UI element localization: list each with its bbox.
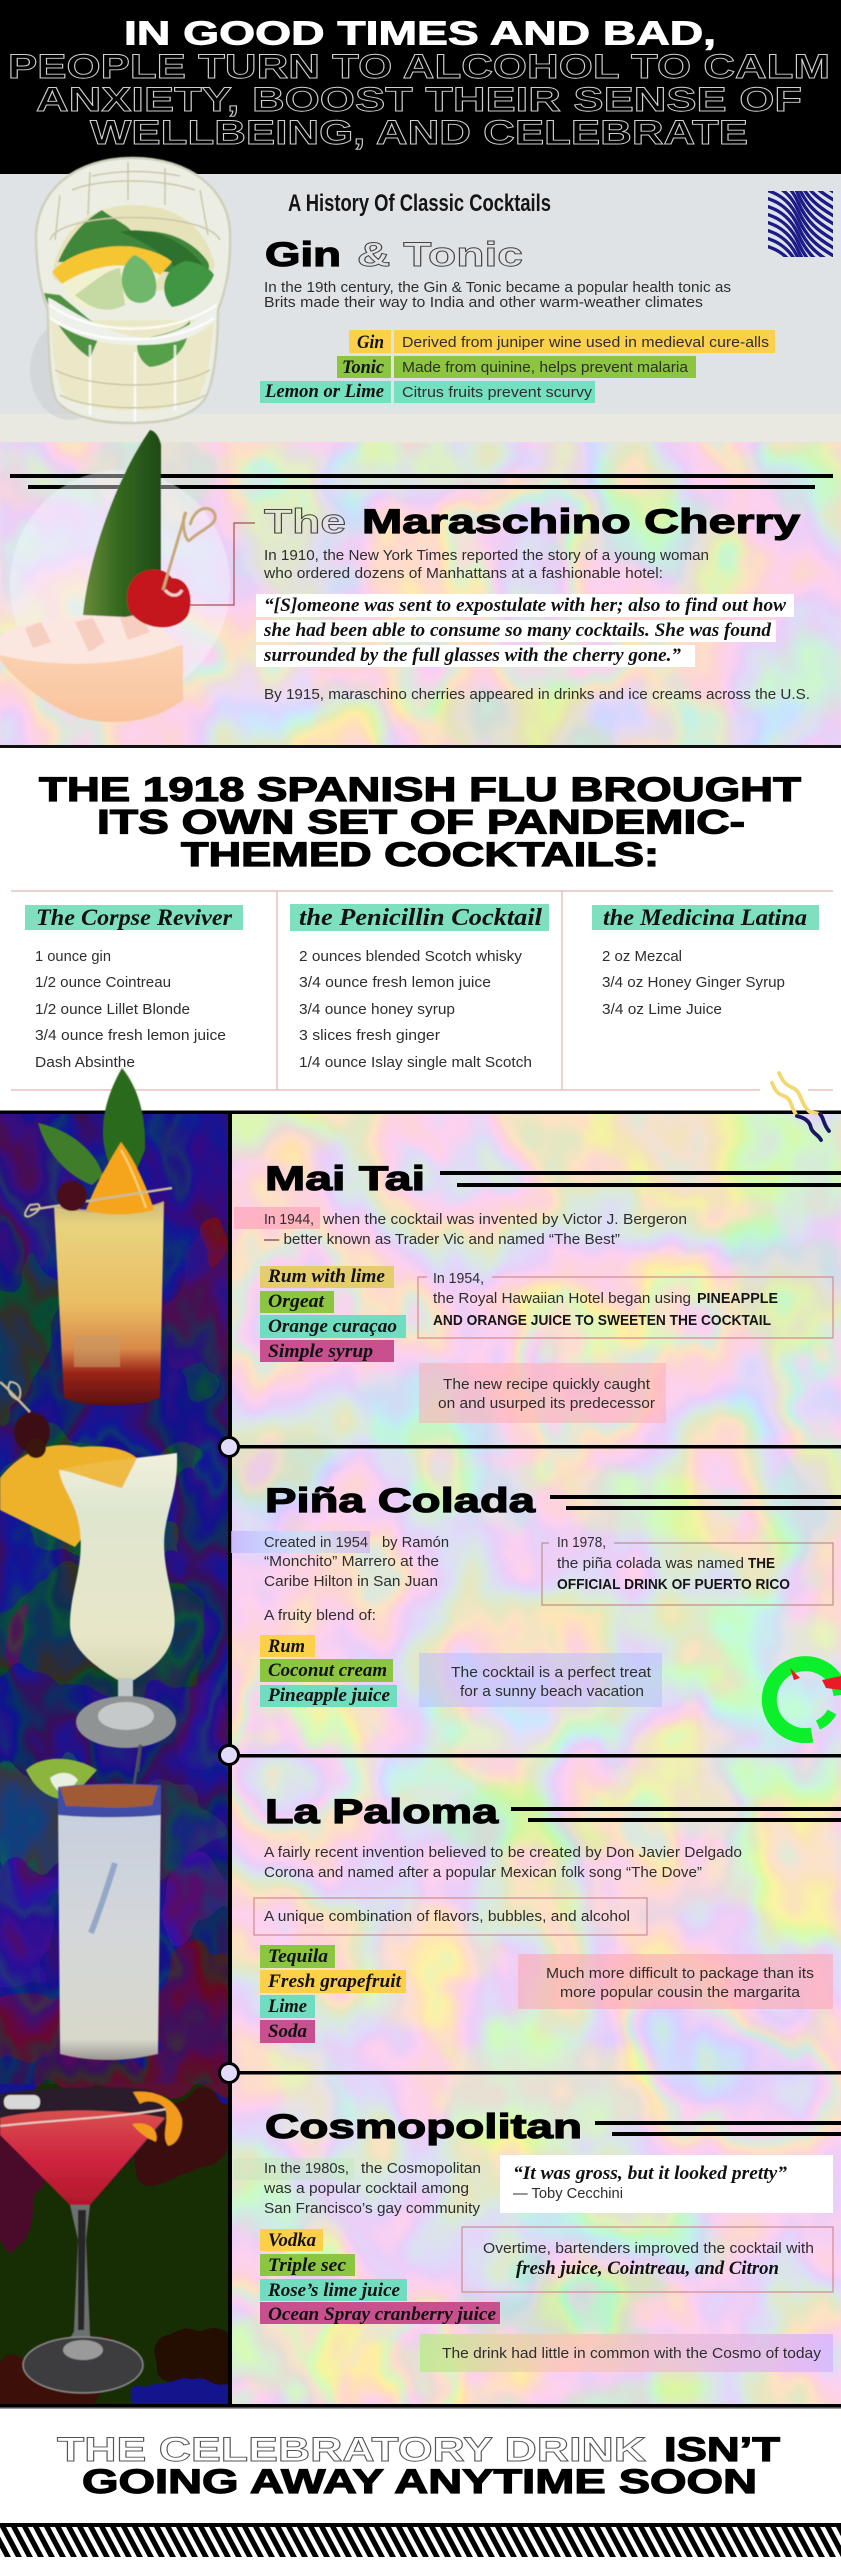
text: gin and tonic history: Brits made their way to India and other warm-weather climates [264, 294, 703, 311]
section: la paloma [26, 1745, 841, 2060]
ingredient chips: Orgeat [268, 1291, 325, 1312]
column: the corpse reviver: 1/2 ounce Lillet Blonde [35, 1001, 190, 1018]
column: the corpse reviver: Dash Absinthe [35, 1054, 135, 1071]
callout: 1954 royal hawaiian: In 1954, [433, 1270, 484, 1287]
ingredient row: gin [349, 330, 775, 353]
text: 1944 origin [234, 1207, 687, 1248]
title: the maraschino cherry [264, 503, 800, 541]
ingredient chips: Tequila [268, 1946, 329, 1967]
callout: harder to package: Much more difficult to package than its [546, 1965, 814, 1982]
headline outlined text: WELLBEING, AND CELEBRATE [90, 114, 748, 152]
illustration: gin glass [30, 158, 230, 423]
ingredient chips [260, 2229, 500, 2325]
ingredient chips [260, 1266, 406, 1362]
ingredient row: lemon or lime [260, 381, 595, 403]
text: 1980s origin: was a popular cocktail among [263, 2180, 469, 2197]
callout: unique combination: A unique combination of flavors, bubbles, and alcohol [264, 1908, 630, 1925]
column: the corpse reviver: 1 ounce gin [35, 948, 111, 965]
ingredient chips: Coconut cream [268, 1660, 387, 1681]
ingredient row: gin: Derived from juniper wine used in medieval cure-alls [402, 334, 769, 351]
ingredient row: tonic: Tonic [342, 357, 385, 378]
quote: toby cecchini: — Toby Cecchini [513, 2185, 623, 2202]
text: 1944 origin: — better known as Trader Vic and named “The Best” [264, 1231, 620, 1248]
text: 1944 origin: when the cocktail was invented by Victor J. Bergeron [322, 1211, 687, 1228]
double rule [10, 474, 833, 489]
ingredient row: gin: Gin [357, 332, 384, 353]
column: the penicillin cocktail: 2 ounces blended Scotch whisky [299, 948, 523, 965]
frame lines and nodes [0, 1110, 841, 2409]
ingredient chips: Rum with lime [267, 1266, 386, 1287]
section: cosmopolitan [0, 2087, 841, 2393]
header banner [0, 0, 841, 174]
panel: gin and tonic [0, 174, 841, 442]
callout: harder to package: more popular cousin the margarita [560, 1984, 801, 2001]
closing headline [57, 2431, 780, 2501]
callout: 1978 official drink: In 1978, [557, 1534, 606, 1551]
ingredient chips: Soda [268, 2021, 307, 2042]
illustration: mai tai glass [0, 1068, 172, 1452]
callout: 1978 official drink: THE [748, 1555, 775, 1572]
headline outlined text: ANXIETY, BOOST THEIR SENSE OF [36, 81, 802, 119]
title: la paloma: La Paloma [265, 1793, 499, 1831]
quote: white highlighted block: surrounded by the full glasses with the cherry gone.” [263, 645, 681, 666]
text: 1980s origin: the Cosmopolitan [361, 2160, 481, 2177]
ingredient chips: Triple sec [268, 2255, 347, 2276]
text: fairly recent invention: A fairly recent invention believed to be created by Don Javier Delgado [264, 1844, 742, 1861]
callout: 1954 royal hawaiian: AND ORANGE JUICE TO SWEETEN THE COCKTAIL [433, 1312, 771, 1329]
column: the medicina latina [592, 905, 819, 1018]
ingredient chips: Simple syrup [268, 1341, 373, 1362]
callout: sunny beach vacation: The cocktail is a perfect treat [451, 1664, 652, 1681]
text: new york times story: In 1910, the New York Times reported the story of a young woman [264, 547, 709, 564]
text: fairly recent invention: Corona and named after a popular Mexican folk song “The Dove” [264, 1864, 702, 1881]
column: the corpse reviver: 1/2 ounce Cointreau [35, 974, 171, 991]
callout: 1978 official drink [542, 1534, 833, 1605]
callout: sunny beach vacation: for a sunny beach vacation [460, 1683, 644, 1700]
heading: 1918 spanish flu: THE 1918 SPANISH FLU BROUGHT [39, 771, 801, 809]
column: the penicillin cocktail: 3 slices fresh ginger [299, 1027, 440, 1044]
section heading: a history of classic cocktails: A History Of Classic Cocktails [288, 190, 551, 217]
table: pandemic cocktails [11, 891, 833, 1090]
column: the corpse reviver: The Corpse Reviver [36, 905, 233, 930]
text: gin and tonic history [264, 279, 731, 311]
ingredient row: lemon or lime: Citrus fruits prevent scurvy [402, 384, 593, 401]
column: the medicina latina: 3/4 oz Lime Juice [602, 1001, 722, 1018]
title: mai tai: Mai Tai [265, 1160, 425, 1198]
column: the penicillin cocktail: 1/4 ounce Islay single malt Scotch [299, 1054, 532, 1071]
double rule [440, 1171, 841, 1187]
icon: green ring [769, 1664, 841, 1736]
headline outlined text: PEOPLE TURN TO ALCOHOL TO CALM [8, 48, 830, 86]
title: pina colada: Piña Colada [265, 1482, 537, 1520]
callout: unique combination [254, 1898, 647, 1935]
quote: toby cecchini [500, 2155, 833, 2213]
illustration: la paloma glass [26, 1745, 161, 2060]
text: gin and tonic history: In the 19th century, the Gin & Tonic became a popular health tonic as [264, 279, 731, 296]
callout: new recipe [419, 1363, 666, 1423]
section: pina colada [0, 1438, 841, 1772]
ingredient row: tonic: Made from quinine, helps prevent malaria [402, 359, 689, 376]
headline outlined text [8, 48, 830, 152]
title: gin and tonic: Gin [265, 236, 341, 274]
quote: toby cecchini: “It was gross, but it looked pretty” [513, 2163, 788, 2184]
closing headline: THE CELEBRATORY DRINK [57, 2431, 647, 2469]
illustration: pina colada glass [0, 1438, 177, 1772]
quote: white highlighted block [256, 594, 794, 667]
title: cosmopolitan: Cosmopolitan [265, 2108, 582, 2146]
headline line: IN GOOD TIMES AND BAD, [124, 14, 716, 52]
text: 1980s origin: San Francisco’s gay community [264, 2200, 480, 2217]
callout: new recipe: on and usurped its predecessor [438, 1395, 655, 1412]
column: the medicina latina: 3/4 oz Honey Ginger Syrup [602, 974, 785, 991]
text: 1980s origin: In the 1980s, [264, 2160, 349, 2177]
ingredient chips: Pineapple juice [267, 1685, 391, 1706]
ingredient row: tonic [337, 356, 696, 378]
quote: white highlighted block: she had been able to consume so many cocktails. She was found [263, 620, 772, 641]
column: the corpse reviver [25, 905, 243, 1071]
panel: maraschino cherry [0, 430, 841, 765]
double rule [595, 2121, 841, 2136]
text: created in 1954: by Ramón [382, 1534, 449, 1551]
title: gin and tonic [265, 236, 523, 274]
icon: wavy stripe pattern [768, 191, 833, 257]
double rule [511, 1807, 841, 1822]
double rule [550, 1495, 841, 1510]
callout: 1954 royal hawaiian: PINEAPPLE [697, 1290, 778, 1307]
column: the penicillin cocktail: 3/4 ounce honey syrup [299, 1001, 455, 1018]
callout: sunny beach vacation [419, 1653, 662, 1707]
quote: white highlighted block: “[S]omeone was sent to expostulate with her; also to find out how [264, 595, 786, 616]
title: the maraschino cherry: The [264, 503, 346, 541]
text: 1944 origin: In 1944, [264, 1211, 314, 1228]
closing headline: ISN’T [664, 2431, 780, 2469]
section: mai tai [0, 1068, 841, 1452]
ingredient chips [260, 1945, 406, 2043]
column: the penicillin cocktail: 3/4 ounce fresh lemon juice [299, 974, 491, 991]
panel: dark swirl backdrop [0, 1114, 228, 2404]
panel: iridescent backdrop [220, 1095, 841, 2420]
ingredient chips: Ocean Spray cranberry juice [268, 2304, 497, 2325]
callout: little in common: The drink had little in common with the Cosmo of today [442, 2345, 822, 2362]
ingredient row: lemon or lime: Lemon or Lime [264, 381, 385, 402]
column: the penicillin cocktail [290, 904, 549, 1071]
callout: 1954 royal hawaiian: the Royal Hawaiian Hotel began using [433, 1290, 691, 1307]
callout: 1954 royal hawaiian [418, 1270, 833, 1338]
heading: 1918 spanish flu [39, 771, 801, 874]
column: the corpse reviver: 3/4 ounce fresh lemon juice [35, 1027, 226, 1044]
column: the medicina latina: 2 oz Mezcal [602, 948, 682, 965]
text: created in 1954: Caribe Hilton in San Juan [264, 1573, 438, 1590]
callout: 1978 official drink: OFFICIAL DRINK OF PUERTO RICO [557, 1576, 790, 1593]
callout: overtime improved [462, 2227, 833, 2292]
title: the maraschino cherry: Maraschino Cherry [362, 503, 800, 541]
closing headline: GOING AWAY ANYTIME SOON [82, 2463, 757, 2501]
heading: 1918 spanish flu: ITS OWN SET OF PANDEMIC- [97, 804, 745, 842]
text: created in 1954: “Monchito” Marrero at the [264, 1553, 439, 1570]
text: new york times story [263, 547, 709, 582]
ingredient chips: Orange curaçao [268, 1316, 397, 1337]
illustration: cocktail with leaf and cherry [0, 430, 230, 722]
text: a fruity blend of: A fruity blend of: [264, 1607, 376, 1624]
text: new york times story: who ordered dozens of Manhattans at a fashionable hotel: [263, 565, 663, 582]
callout: 1978 official drink: the piña colada was named [557, 1555, 744, 1572]
text: by 1915: By 1915, maraschino cherries appeared in drinks and ice creams across the U.S. [264, 686, 810, 703]
text: 1980s origin [234, 2158, 481, 2217]
heading: 1918 spanish flu: THEMED COCKTAILS: [181, 836, 659, 874]
icon: squiggle [772, 1073, 829, 1140]
title: gin and tonic: & Tonic [357, 236, 523, 274]
ingredient chips: Rose’s lime juice [267, 2280, 401, 2301]
ingredient chips: Rum [267, 1636, 305, 1657]
ingredient chips [260, 1635, 397, 1707]
callout: new recipe: The new recipe quickly caught [443, 1376, 651, 1393]
callout: harder to package [518, 1954, 833, 2009]
ingredient chips: Lime [267, 1996, 308, 2017]
callout: overtime improved: fresh juice, Cointreau, and Citron [516, 2258, 779, 2279]
text: fairly recent invention [264, 1844, 742, 1881]
illustration: cosmopolitan glass [0, 2087, 182, 2393]
ingredient chips: Fresh grapefruit [267, 1971, 402, 1992]
ingredient chips: Vodka [268, 2230, 316, 2251]
text: created in 1954 [231, 1531, 449, 1590]
connector line [190, 523, 255, 605]
text: created in 1954: Created in 1954 [264, 1534, 368, 1551]
column: the medicina latina: the Medicina Latina [603, 905, 807, 930]
footer stripe band [0, 2523, 841, 2557]
column: the penicillin cocktail: the Penicillin Cocktail [299, 905, 542, 931]
callout: overtime improved: Overtime, bartenders improved the cocktail with [483, 2240, 814, 2257]
callout: little in common [420, 2334, 833, 2372]
